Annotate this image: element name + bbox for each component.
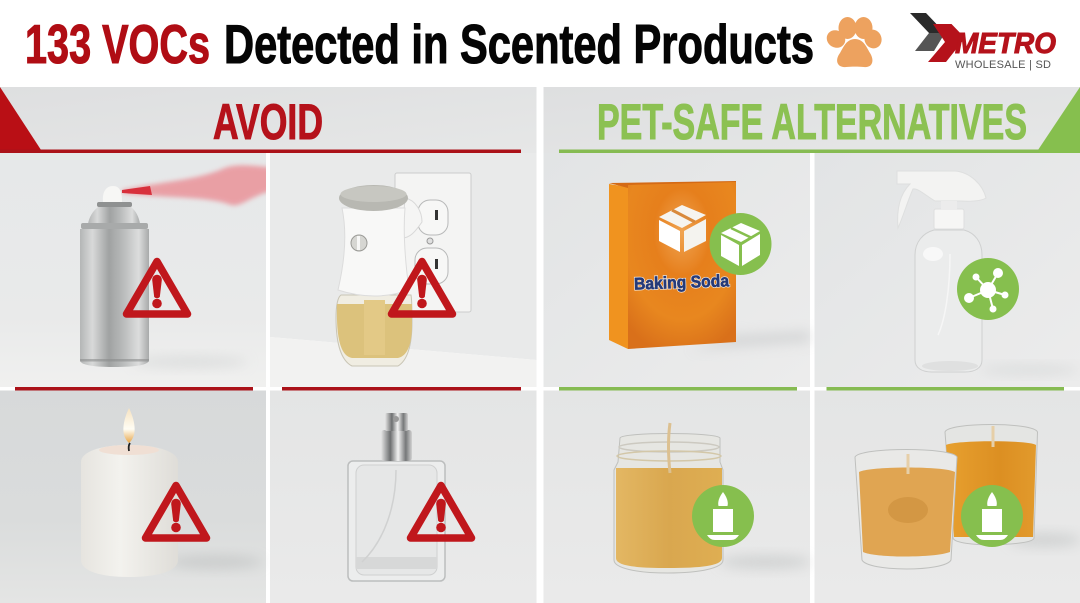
icon: warning (126, 262, 188, 314)
icon: candle badge (961, 485, 1023, 547)
spray can (80, 186, 149, 367)
front candle (855, 450, 957, 569)
heading: avoid: AVOID (213, 94, 323, 150)
product label: Baking Soda (634, 271, 730, 294)
cell: pillar candle (0, 390, 266, 603)
icon: candle badge (692, 485, 754, 547)
cell: aerosol spray (0, 153, 275, 387)
box graphic (659, 205, 706, 252)
cell: two beeswax candles (814, 390, 1080, 603)
icon: molecule badge (957, 258, 1019, 320)
icon: paw print (824, 17, 884, 67)
title: 133 VOCs (25, 13, 210, 75)
white candle (81, 408, 178, 577)
icon: warning (410, 486, 472, 538)
panel: avoid (0, 87, 536, 603)
plug-in device (336, 185, 422, 366)
logo: Metro Wholesale SD: WHOLESALE | SD (955, 59, 1051, 71)
logo: Metro Wholesale SD (910, 13, 1056, 71)
red corner triangle (0, 87, 43, 153)
icon: warning (392, 262, 452, 314)
cell: spray bottle (814, 153, 1080, 387)
rear candle (945, 424, 1038, 545)
baking soda box (609, 181, 736, 349)
icon: green box badge (710, 213, 772, 275)
jar candle (614, 423, 723, 573)
title: Detected in Scented Products (224, 13, 814, 75)
title (25, 13, 814, 75)
perfume bottle (348, 413, 445, 581)
product label: Baking Soda (634, 271, 730, 294)
clear spray bottle (897, 171, 986, 372)
logo: Metro Wholesale SD: METRO (955, 28, 1056, 60)
cell: plug-in air freshener (270, 153, 536, 387)
spray plume (122, 165, 275, 205)
cell: perfume bottle (270, 390, 536, 603)
green corner triangle (1036, 87, 1080, 153)
cell: beeswax jar candle (544, 390, 811, 603)
cell: baking soda (544, 153, 810, 387)
icon: warning (146, 486, 206, 538)
panel: pet-safe alternatives (544, 87, 1080, 603)
wall outlet (395, 173, 471, 312)
